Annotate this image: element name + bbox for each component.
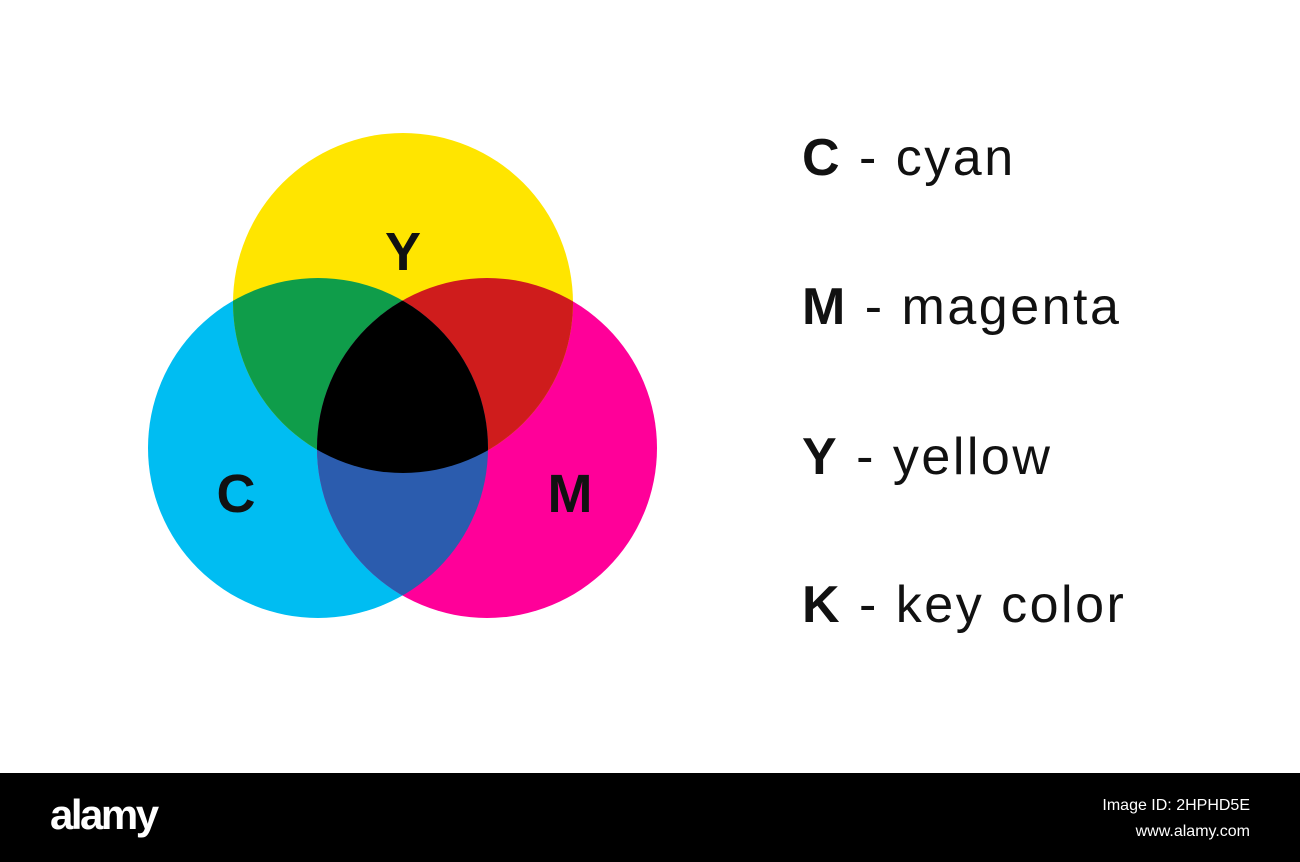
label: Y: Y (385, 222, 421, 282)
overlap: red (317, 278, 573, 450)
legend: yellow: Y - yellow (802, 428, 1052, 486)
legend: cyan: C - cyan (802, 129, 1016, 187)
circle: cyan (148, 278, 488, 618)
footer bar (0, 773, 1300, 862)
legend: magenta: M - magenta (802, 278, 1121, 336)
diagram: CMY venn (148, 133, 657, 618)
legend: key color: K - key color (802, 576, 1126, 634)
footer id: Image ID: 2HPHD5E (1102, 797, 1250, 814)
label: M: M (548, 464, 592, 524)
circle: yellow (233, 133, 573, 473)
overlap: blue (317, 300, 488, 596)
label: C: C (216, 464, 256, 524)
overlap: black (317, 300, 488, 473)
footer id (1102, 797, 1250, 840)
circle: magenta (317, 278, 657, 618)
overlap: green (233, 278, 402, 450)
footer logo: alamy (50, 791, 157, 838)
footer id: www.alamy.com (1136, 823, 1250, 840)
